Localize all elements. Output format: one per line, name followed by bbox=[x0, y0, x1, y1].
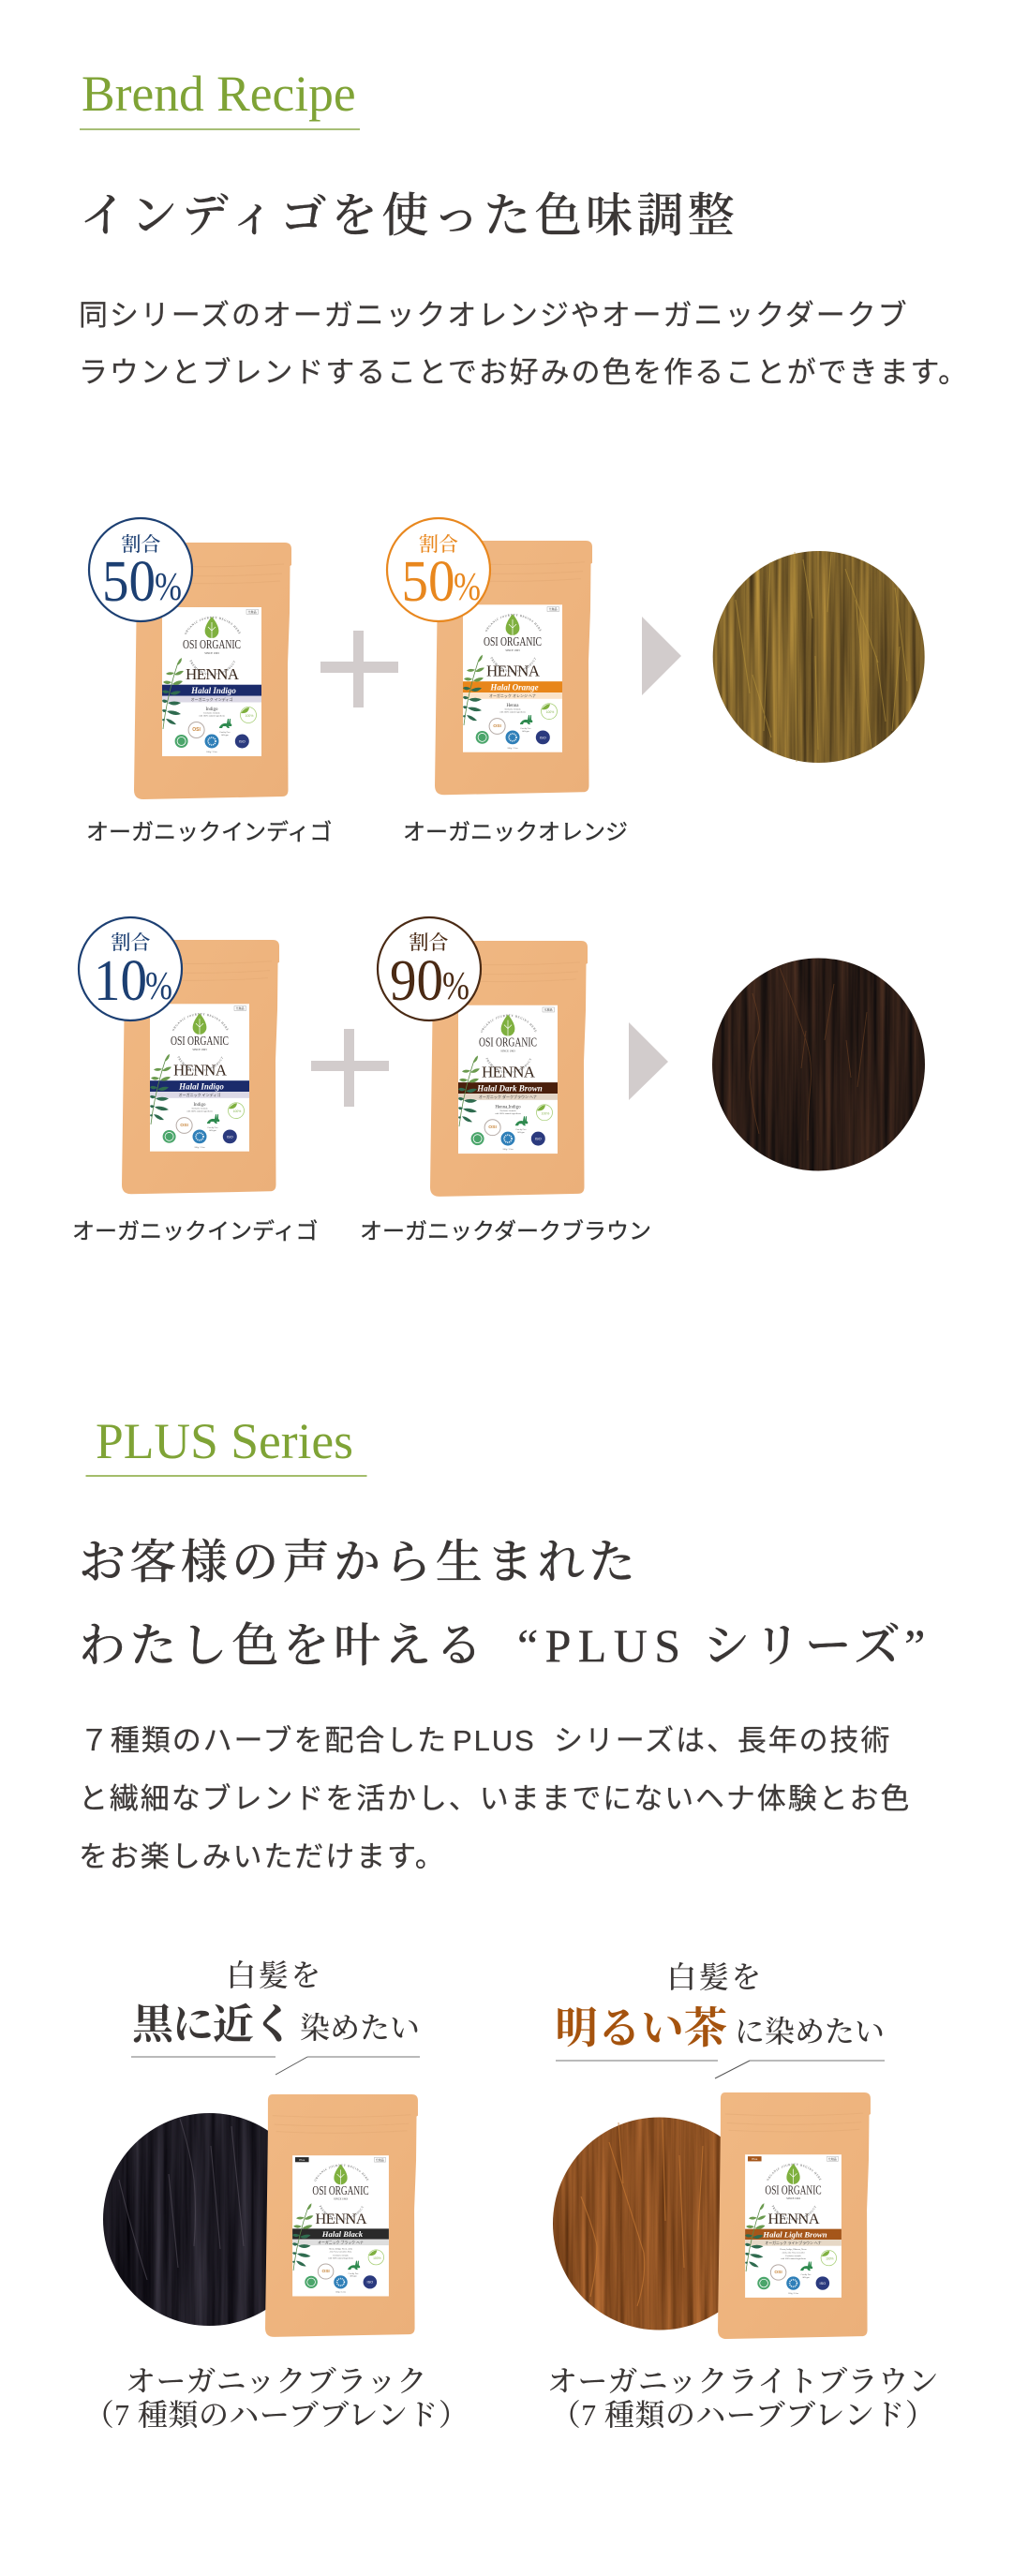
product: organic light brown pouch: with 100% natural ingredients bbox=[781, 2257, 806, 2260]
product: organic orange pouch: 100g / 3.5oz bbox=[507, 747, 518, 750]
product: organic black pouch: オーガニック ブラック ヘナ bbox=[318, 2241, 364, 2245]
text block: blend description: 同シリーズのオーガニックオレンジやオーガニックダークブ bbox=[79, 299, 909, 332]
badge: ratio 50% navy: 割合 bbox=[122, 533, 161, 556]
product: organic black pouch: OSI ORGANIC bbox=[312, 2183, 369, 2197]
caption: organic light brown: オーガニックライトブラウン bbox=[547, 2364, 939, 2398]
caption: organic indigo: オーガニックインディゴ bbox=[72, 1219, 318, 1244]
title: PLUS series headline bbox=[79, 1536, 930, 1672]
badge: ratio 10% navy bbox=[79, 917, 182, 1020]
product: organic indigo pouch: Cruelty Free bbox=[219, 732, 231, 734]
caption: organic black bbox=[84, 2364, 469, 2432]
product: organic orange pouch: SINCE 1963 bbox=[505, 648, 520, 652]
badge: ratio 10% navy: 10 bbox=[94, 949, 147, 1013]
product: organic light brown pouch: Amla, Aloe Vera, Lavender bbox=[782, 2251, 805, 2254]
product: organic light brown pouch: Plus bbox=[752, 2157, 758, 2161]
hair swatch: light brown bbox=[553, 2118, 766, 2330]
product: organic indigo pouch: オーガニック インディゴ bbox=[179, 1093, 220, 1097]
title: PLUS series headline: お客様の声から生まれた bbox=[79, 1536, 639, 1588]
title: indigo colour adjustment: インディゴを使った色味調整 bbox=[80, 189, 738, 242]
callout: bright brown: 白髪を bbox=[666, 1960, 764, 1994]
arrow: result bbox=[642, 617, 681, 695]
product: organic light brown pouch: 化粧品 bbox=[828, 2156, 837, 2161]
product: organic black pouch: 化粧品 bbox=[376, 2157, 384, 2162]
product: organic dark brown pouch: Henna,Indigo bbox=[495, 1105, 521, 1109]
heading label: PLUS Series: PLUS Series bbox=[96, 1413, 353, 1469]
product: organic light brown pouch: &Vegan bbox=[802, 2276, 811, 2279]
product: organic dark brown pouch: 100% bbox=[542, 1111, 549, 1115]
product: organic black pouch: HENNA bbox=[315, 2211, 367, 2227]
caption: organic light brown: （7 種類のハーブブレンド） bbox=[551, 2398, 935, 2432]
badge: ratio 50% orange: 50 bbox=[401, 550, 455, 614]
product: organic indigo pouch: Exclusive formula bbox=[192, 1108, 207, 1110]
hair swatch: dark brown bbox=[712, 958, 925, 1171]
product: organic dark brown pouch: OSI ORGANIC bbox=[479, 1036, 537, 1050]
title: PLUS series headline: わたし色を叶える bbox=[79, 1619, 486, 1672]
product: organic light brown pouch: Exclusive formula bbox=[785, 2255, 801, 2257]
product: organic indigo pouch: ORGANIC JOURNEY BEGINS HERE bbox=[172, 1013, 229, 1031]
product: organic light brown pouch: SINCE 1963 bbox=[786, 2196, 800, 2200]
product: organic orange pouch: Henna bbox=[506, 704, 519, 708]
badge: ratio 50% navy bbox=[89, 518, 192, 621]
product: organic black pouch: OSI bbox=[321, 2269, 330, 2274]
caption: organic black: （7 種類のハーブブレンド） bbox=[84, 2398, 469, 2432]
callout: bright brown: 明るい茶 bbox=[555, 2004, 727, 2052]
product: organic orange pouch: Cruelty Free bbox=[520, 728, 531, 730]
title: PLUS series headline: シリーズ” bbox=[703, 1619, 930, 1672]
product: organic dark brown pouch: with 100% natural ingredients bbox=[495, 1112, 521, 1115]
product: organic black pouch: Halal Black bbox=[321, 2229, 364, 2239]
product: organic indigo pouch: 100% bbox=[246, 714, 253, 718]
product: organic indigo pouch: OSI bbox=[180, 1123, 189, 1128]
callout: close to black: 染めたい bbox=[300, 2011, 420, 2045]
text block: PLUS series description: ７種類のハーブを配合した bbox=[80, 1724, 448, 1757]
product: organic black pouch: SINCE 1963 bbox=[334, 2196, 349, 2200]
product: organic indigo pouch: 化粧品 bbox=[248, 609, 257, 614]
product: organic dark brown pouch: 100g / 3.5oz bbox=[502, 1148, 514, 1151]
product: organic black pouch: ORGANIC JOURNEY BEGINS HERE bbox=[314, 2165, 369, 2181]
panel: organic black bbox=[84, 1958, 469, 2432]
product: organic dark brown pouch bbox=[430, 941, 588, 1197]
product: organic indigo pouch: with 100% natural ingredients bbox=[186, 1110, 213, 1113]
callout: close to black: 白髪を bbox=[226, 1958, 323, 1992]
product: organic indigo pouch: HENNA bbox=[173, 1062, 228, 1080]
badge: ratio 50% orange: % bbox=[454, 566, 481, 609]
product: organic orange pouch: OSI bbox=[493, 723, 502, 729]
product: organic indigo pouch: 100g / 3.5oz bbox=[194, 1146, 205, 1149]
badge: ratio 90% brown: % bbox=[442, 965, 469, 1008]
product: organic orange pouch: 100% bbox=[546, 710, 554, 714]
product: organic black pouch: &Vegan bbox=[350, 2275, 358, 2278]
text block: PLUS series description: PLUS bbox=[453, 1724, 536, 1757]
badge: ratio 10% navy: 割合 bbox=[111, 931, 150, 954]
product: organic indigo pouch: ISO bbox=[239, 738, 246, 744]
product: organic orange pouch: &Vegan bbox=[522, 730, 530, 733]
product: organic indigo pouch: PREMIUM QUALITY PRODUCT bbox=[178, 1056, 223, 1072]
product: organic orange pouch: HENNA bbox=[486, 663, 541, 680]
text block: blend description: ラウンとブレンドすることでお好みの色を作ることができます。 bbox=[79, 356, 969, 389]
product: organic light brown pouch: HENNA bbox=[767, 2210, 820, 2227]
product: organic black pouch: 100g / 3.5oz bbox=[335, 2291, 346, 2294]
product: organic dark brown pouch: SINCE 1963 bbox=[500, 1050, 515, 1053]
icon: plus sign bbox=[320, 631, 398, 707]
product: organic dark brown pouch: OSI bbox=[488, 1124, 498, 1130]
title: PLUS series headline: “PLUS bbox=[517, 1619, 687, 1672]
product: organic black pouch: Cruelty Free bbox=[349, 2273, 359, 2275]
product: organic indigo pouch: OSI ORGANIC bbox=[171, 1035, 229, 1049]
product: organic black pouch: ISO bbox=[366, 2281, 373, 2285]
caption: organic black: オーガニックブラック bbox=[126, 2364, 427, 2398]
product: organic dark brown pouch: オーガニック ダークブラウン ヘナ bbox=[479, 1094, 537, 1099]
product: organic dark brown pouch: ORGANIC JOURNEY BEGINS HERE bbox=[481, 1014, 537, 1033]
product: organic indigo pouch: OSI bbox=[192, 727, 201, 733]
icon: plus sign bbox=[311, 1029, 389, 1107]
product: organic light brown pouch: ORGANIC JOURNEY BEGINS HERE bbox=[767, 2163, 821, 2181]
product: organic orange pouch: ORGANIC JOURNEY BEGINS HERE bbox=[485, 614, 542, 632]
product: organic indigo pouch: HENNA bbox=[186, 665, 240, 683]
text block: blend description bbox=[79, 299, 969, 389]
product: organic orange pouch: OSI ORGANIC bbox=[484, 635, 542, 649]
product: organic indigo pouch: Exclusive formula bbox=[204, 712, 219, 714]
product: organic indigo pouch: SINCE 1963 bbox=[204, 651, 219, 655]
hair swatch: golden brown bbox=[713, 551, 925, 763]
product: organic black pouch: Plus bbox=[299, 2158, 305, 2162]
caption: organic orange: オーガニックオレンジ bbox=[403, 820, 628, 845]
product: organic dark brown pouch: 化粧品 bbox=[544, 1007, 553, 1012]
product: organic orange pouch: with 100% natural ingredients bbox=[499, 711, 526, 714]
callout: bright brown: に染めたい bbox=[735, 2015, 885, 2048]
product: organic dark brown pouch: &Vegan bbox=[517, 1131, 526, 1134]
badge: ratio 10% navy: % bbox=[145, 965, 172, 1008]
product: organic black pouch: Aloe Vera, Lavender, Rose bbox=[330, 2251, 351, 2254]
product: organic indigo pouch: 化粧品 bbox=[236, 1005, 245, 1010]
product: organic indigo pouch: 100% bbox=[233, 1109, 241, 1113]
product: organic light brown pouch: Henna, Indigo, Hibiscus, Neem bbox=[781, 2248, 807, 2251]
product: organic indigo pouch: &Vegan bbox=[209, 1129, 217, 1132]
product: organic indigo pouch: &Vegan bbox=[221, 734, 230, 737]
text block: PLUS series description: をお楽しみいただけます。 bbox=[79, 1840, 446, 1873]
recipe row 2: indigo 10% plus dark brown 90% bbox=[72, 916, 925, 1244]
product: organic black pouch: Exclusive formula bbox=[333, 2254, 349, 2256]
text block: PLUS series description bbox=[79, 1724, 911, 1873]
product: organic orange pouch: 化粧品 bbox=[549, 606, 558, 611]
product: organic indigo pouch: ORGANIC JOURNEY BEGINS HERE bbox=[185, 617, 241, 635]
recipe row 1: indigo 50% plus orange 50% bbox=[86, 517, 925, 845]
product: organic black pouch: with 100% natural ingredients bbox=[328, 2256, 353, 2259]
badge: ratio 90% brown: 割合 bbox=[409, 931, 448, 954]
section: PLUS Series bbox=[79, 1413, 930, 1873]
badge: ratio 50% orange bbox=[387, 518, 490, 621]
product: organic light brown pouch: オーガニック ライトブラウン ヘナ bbox=[765, 2241, 822, 2245]
product: organic light brown pouch: Cruelty Free bbox=[801, 2274, 812, 2276]
product: organic indigo pouch: ISO bbox=[227, 1134, 233, 1139]
arrow: result bbox=[629, 1022, 668, 1100]
product: organic indigo pouch bbox=[122, 940, 279, 1194]
product: organic black pouch bbox=[265, 2094, 418, 2337]
badge: ratio 50% navy: 50 bbox=[102, 550, 156, 614]
product: organic indigo pouch: 100g / 3.5oz bbox=[206, 751, 217, 753]
product: organic indigo pouch: PREMIUM QUALITY PRODUCT bbox=[189, 660, 235, 676]
text block: PLUS series description: と繊細なブレンドを活かし、いままでにないヘナ体験とお色 bbox=[79, 1782, 911, 1815]
caption: organic dark brown: オーガニックダークブラウン bbox=[360, 1219, 651, 1244]
callout: close to black: 黒に近く bbox=[132, 2002, 293, 2047]
product: organic indigo pouch: Indigo bbox=[193, 1103, 206, 1108]
product: organic orange pouch bbox=[435, 541, 592, 795]
product: organic dark brown pouch: Halal Dark Brown bbox=[476, 1083, 543, 1093]
product: organic indigo pouch: OSI ORGANIC bbox=[183, 638, 241, 652]
product: organic orange pouch: ISO bbox=[540, 735, 546, 739]
product: organic indigo pouch: Halal Indigo bbox=[190, 686, 236, 695]
product: organic black pouch: 100% bbox=[373, 2256, 381, 2260]
product: organic dark brown pouch: ISO bbox=[535, 1137, 542, 1141]
product: organic light brown pouch: 100% bbox=[826, 2257, 834, 2261]
product: organic light brown pouch bbox=[718, 2092, 871, 2339]
badge: ratio 50% orange: 割合 bbox=[419, 533, 458, 556]
product: organic orange pouch: Halal Orange bbox=[489, 682, 539, 692]
hair swatch: black bbox=[103, 2113, 316, 2326]
product: organic indigo pouch: Indigo bbox=[205, 707, 218, 712]
product: organic orange pouch: Exclusive formula bbox=[505, 708, 520, 711]
product: organic light brown pouch: OSI ORGANIC bbox=[765, 2183, 822, 2196]
caption: organic indigo: オーガニックインディゴ bbox=[86, 820, 332, 845]
product: organic light brown pouch: Halal Light Brown bbox=[762, 2230, 827, 2240]
product: organic indigo pouch: with 100% natural ingredients bbox=[199, 714, 225, 718]
product: organic indigo pouch bbox=[134, 543, 291, 799]
badge: ratio 90% brown bbox=[378, 917, 481, 1020]
panel: organic light brown bbox=[547, 1960, 939, 2432]
product: organic dark brown pouch: HENNA bbox=[482, 1063, 536, 1080]
product: organic black pouch: PREMIUM QUALITY PRODUCT bbox=[319, 2206, 364, 2221]
product: organic orange pouch: オーガニック オレンジ ヘナ bbox=[489, 693, 536, 698]
product: organic dark brown pouch: Exclusive formula bbox=[500, 1109, 515, 1112]
product: organic light brown pouch: ISO bbox=[819, 2282, 826, 2286]
callout: close to black bbox=[131, 1958, 420, 2075]
product: organic indigo pouch: Cruelty Free bbox=[207, 1127, 218, 1129]
product: organic indigo pouch: Halal Indigo bbox=[178, 1081, 224, 1091]
badge: ratio 90% brown: 90 bbox=[390, 949, 443, 1013]
product: organic indigo pouch: SINCE 1963 bbox=[192, 1048, 207, 1051]
callout: bright brown bbox=[555, 1960, 885, 2078]
caption: organic light brown bbox=[547, 2364, 939, 2432]
badge: ratio 50% navy: % bbox=[155, 566, 182, 609]
product: organic indigo pouch: オーガニック インディゴ bbox=[191, 696, 232, 702]
product: organic light brown pouch: OSI bbox=[774, 2270, 782, 2275]
product: organic light brown pouch: 100g / 3.5oz bbox=[788, 2292, 798, 2295]
product: organic dark brown pouch: Cruelty Free bbox=[515, 1129, 527, 1131]
product: organic light brown pouch: PREMIUM QUALITY PRODUCT bbox=[772, 2205, 816, 2221]
heading label: Brend Recipe: Brend Recipe bbox=[82, 66, 356, 122]
product: organic black pouch: Henna, Indigo, Neem, Amla bbox=[329, 2247, 352, 2250]
text block: PLUS series description: シリーズは、長年の技術 bbox=[554, 1724, 891, 1757]
product: organic orange pouch: PREMIUM QUALITY PRODUCT bbox=[491, 657, 536, 673]
product: organic dark brown pouch: PREMIUM QUALITY PRODUCT bbox=[485, 1057, 532, 1074]
